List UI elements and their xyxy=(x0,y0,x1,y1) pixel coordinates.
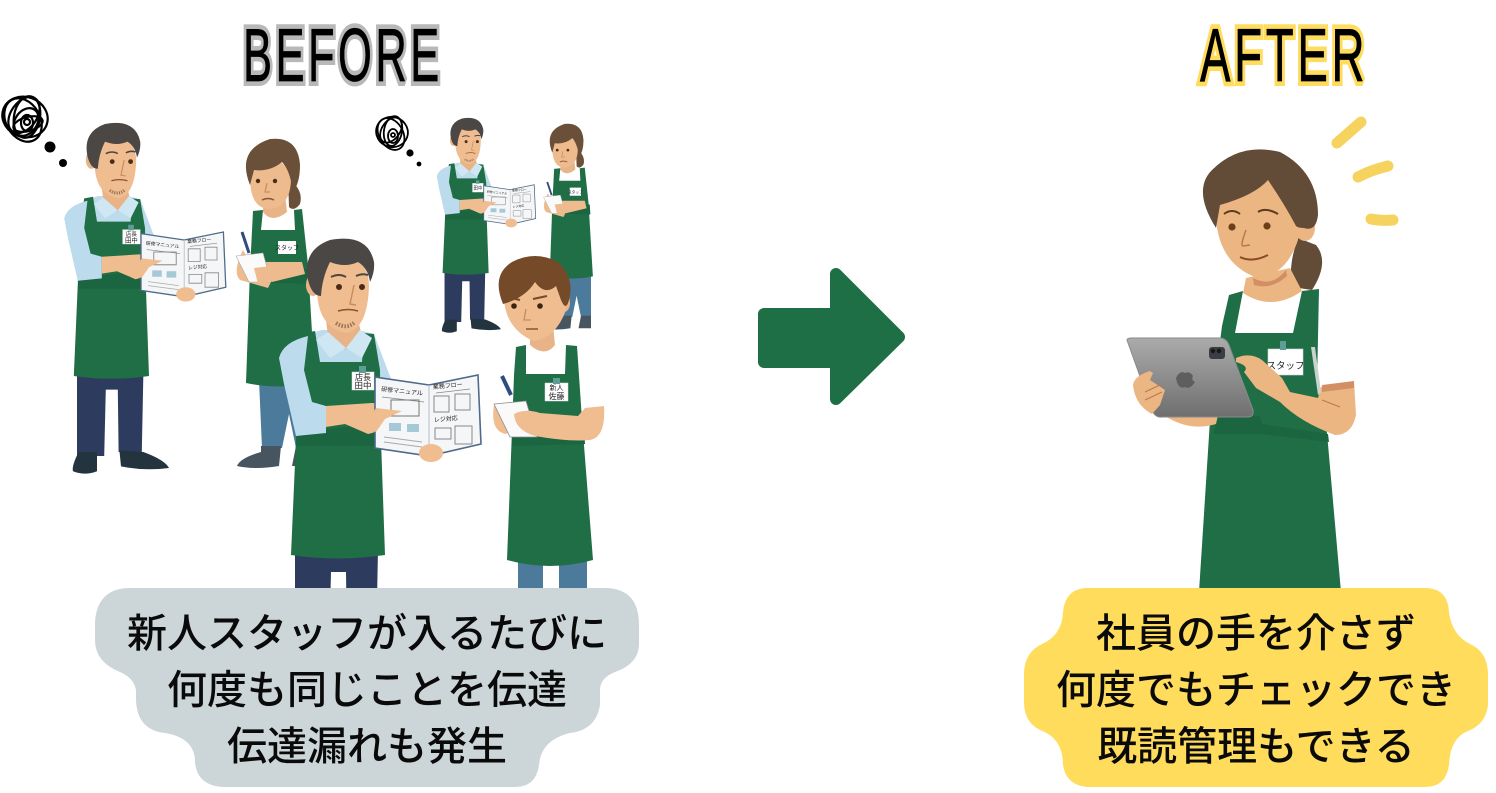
figure: new staff boy with notepad xyxy=(493,256,606,600)
figure: manager with manual, large xyxy=(279,239,481,677)
figure: manager with manual, small: 研修マニュアル xyxy=(487,189,508,196)
figure: manager with manual, large: 研修マニュアル xyxy=(381,385,423,397)
figure: manager with manual, large: 店長 xyxy=(355,373,371,382)
arrow: before to after xyxy=(764,274,899,399)
figure: manager with manual, medium: レジ対応 xyxy=(188,263,208,272)
icon: sparkle lines xyxy=(1337,122,1393,220)
title: BEFORE: BEFORE xyxy=(243,14,443,97)
callout: before message xyxy=(95,588,639,787)
figure: staff using tablet: スタッフ xyxy=(1266,361,1305,372)
callout: before message: 何度も同じことを伝達 xyxy=(167,668,567,712)
title: BEFORE: BEFORE xyxy=(243,14,443,97)
callout: after message: 何度でもチェックでき xyxy=(1056,668,1456,712)
figure: woman with notepad, small xyxy=(544,124,597,330)
figure: staff using tablet xyxy=(1127,149,1356,592)
figure: woman with notepad, medium xyxy=(236,139,322,468)
title: AFTER: AFTER xyxy=(1200,15,1368,98)
figure: manager with manual, small xyxy=(437,118,536,333)
figure: manager with manual, medium xyxy=(64,123,226,474)
figure: manager with manual, small: 田中 xyxy=(473,185,482,192)
figure: manager with manual, large: 業務フロー xyxy=(432,380,463,391)
figure: new staff boy with notepad: 佐藤 xyxy=(548,391,564,401)
icon: confused thought scribble, large xyxy=(0,90,67,167)
figure: manager with manual, small: 業務フロー xyxy=(512,186,527,193)
title: AFTER: AFTER xyxy=(1200,15,1368,98)
callout: after message: 既読管理もできる xyxy=(1097,725,1415,769)
figure: manager with manual, medium: 田中 xyxy=(125,235,138,244)
callout: after message: 社員の手を介さず xyxy=(1096,612,1416,656)
callout: after message xyxy=(1024,588,1488,787)
figure: manager with manual, large: 田中 xyxy=(354,380,372,390)
icon: confused thought scribble, small xyxy=(372,112,421,166)
figure: manager with manual, medium: 店長 xyxy=(126,231,137,238)
figure: woman with notepad, small: スタッフ xyxy=(568,189,583,194)
callout: before message: 新人スタッフが入るたびに xyxy=(127,612,607,656)
figure: manager with manual, small: レジ対応 xyxy=(512,203,525,209)
figure: new staff boy with notepad: 新人 xyxy=(550,383,564,392)
figure: manager with manual, medium: 業務フロー xyxy=(187,236,212,245)
figure: manager with manual, large: レジ対応 xyxy=(433,414,458,424)
figure: woman with notepad, medium: スタッフ xyxy=(275,244,299,252)
figure: manager with manual, medium: 研修マニュアル xyxy=(146,240,180,250)
callout: before message: 伝達漏れも発生 xyxy=(227,725,507,769)
